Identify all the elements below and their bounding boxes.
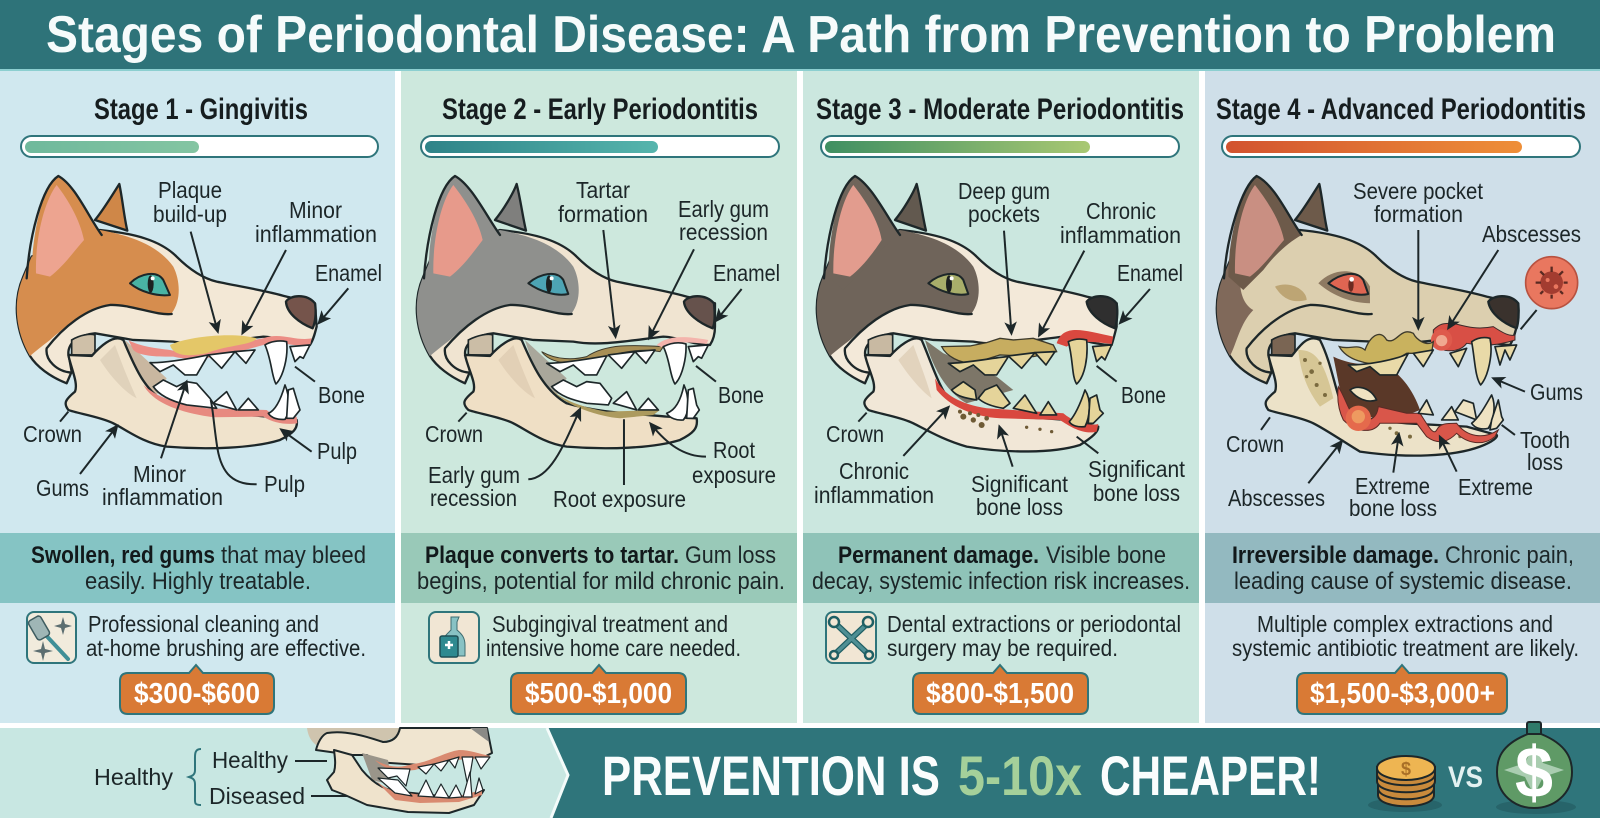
icon: coin stack: $ [1401,759,1411,779]
prevention message: CHEAPER! [1100,744,1321,807]
severity bar: stage 3 [821,136,1179,157]
callout: gums: Gums [36,475,89,501]
callout: deep gum pockets: pockets [968,201,1040,227]
callout: crown [425,413,483,447]
symptom strip: stage 3: Visible bone [1046,542,1166,569]
label: healthy line: Healthy [212,747,288,773]
callout: significant bone loss centre [971,428,1069,520]
illustration: dog skull stage 3 [817,176,1117,451]
callout: early gum recession lower: Early gum [428,462,520,488]
callout: root exposure right: exposure [692,462,776,488]
symptom strip: stage 3 [803,533,1199,603]
callout: crown [1226,417,1284,457]
callout: early gum recession upper [650,196,769,337]
callout: minor inflammation upper: inflammation [255,221,377,247]
callout: chronic inflammation upper [1040,198,1181,334]
callout: tartar formation: Tartar [576,177,630,203]
callout: crown: Crown [425,421,483,447]
callout: chronic inflammation lower: Chronic [839,458,909,484]
callout: enamel [713,260,780,319]
symptom strip: stage 2 [401,533,797,603]
prevention message [602,744,1321,807]
callout: enamel: Enamel [315,260,382,286]
illustration: dog skull stage 2 [417,176,715,448]
icon: money bag [1496,722,1576,814]
vs label: VS [1448,761,1483,794]
callout: crown: Crown [826,421,884,447]
callout: minor inflammation lower: Minor [133,461,186,487]
cost badge: stage 3: $800-$1,500 [926,678,1074,710]
callout: significant bone loss right [1077,437,1186,506]
symptom strip: stage 2: Gum loss [685,542,776,569]
symptom strip: stage 3: decay, systemic infection risk increases. [812,568,1190,595]
callout: extreme bone loss [1349,436,1437,521]
treatment text: stage 3 [887,611,1181,661]
callout: extreme [1441,438,1533,500]
symptom strip: stage 1: easily. Highly treatable. [85,568,311,595]
treatment text: stage 3: surgery may be required. [887,635,1118,661]
callout: root exposure lower [553,419,686,512]
callout: significant bone loss centre: Significant [971,471,1069,497]
callout: severe pocket formation: Severe pocket [1353,178,1484,204]
callout: pulp right [283,431,357,464]
callout: root exposure right [652,425,776,488]
cost badge: stage 4 [1297,665,1507,714]
label: healthy: Healthy [94,764,174,790]
callout: bone: Bone [1121,382,1166,408]
panel: stage 2 early periodontitis [401,71,797,723]
symptom strip: stage 4 [1205,533,1600,603]
callout: pulp right: Pulp [317,438,357,464]
callout: gums [1495,379,1583,405]
callout: early gum recession lower: recession [430,485,517,511]
callout: extreme bone loss: bone loss [1349,495,1437,521]
cost badge: stage 3 [913,665,1088,714]
callout: root exposure lower: Root exposure [553,486,686,512]
callout: minor inflammation upper [243,197,377,332]
callout: crown [826,413,884,447]
callout: tooth loss: loss [1527,449,1563,475]
treatment text: stage 3: Dental extractions or periodontal [887,611,1181,637]
callout: gums [36,427,116,501]
symptom strip: stage 2: begins, potential for mild chronic pain. [417,568,785,595]
callout: bone [696,366,764,408]
callout: enamel: Enamel [713,260,780,286]
callout: tooth loss [1502,425,1570,475]
callout: abscesses lower: Abscesses [1228,485,1325,511]
severity bar: stage 4 [1222,136,1580,157]
callout: chronic inflammation upper: Chronic [1086,198,1156,224]
callout: pulp lower: Pulp [264,471,305,497]
callout: bone [295,367,365,408]
panel: stage 1 gingivitis [0,71,395,723]
symptom strip: stage 1 [0,533,395,603]
symptom strip: stage 3: Permanent damage. [838,542,1039,569]
icon: money bag: $ [1515,733,1553,813]
icon: crossed wrenches [826,612,876,663]
callout: plaque build-up: Plaque [158,177,222,203]
callout: extreme: Extreme [1458,474,1533,500]
heading: stage 2: Stage 2 - Early Periodontitis [442,93,758,126]
icon: antiseptic bottle [429,612,479,663]
icon: brush [27,612,76,663]
callout: chronic inflammation lower [814,408,947,508]
cost badge: stage 4: $1,500-$3,000+ [1310,678,1495,710]
callout: early gum recession upper: Early gum [678,196,769,222]
heading: stage 1: Stage 1 - Gingivitis [94,93,308,126]
callout: early gum recession upper: recession [679,219,768,245]
callout: minor inflammation lower: inflammation [102,484,223,510]
callout: bone: Bone [318,382,365,408]
callout: chronic inflammation upper: inflammation [1060,222,1181,248]
illustration: small jaw [307,728,492,813]
callout: bone: Bone [718,382,764,408]
callout: significant bone loss right: bone loss [1093,480,1180,506]
treatment text: stage 4: Multiple complex extractions and [1257,611,1553,637]
callout: crown: Crown [23,421,82,447]
callout: chronic inflammation lower: inflammation [814,482,934,508]
callout: significant bone loss right: Significant [1088,456,1186,482]
callout: early gum recession lower [428,411,579,511]
brace [189,749,201,805]
callout: tartar formation: formation [558,201,648,227]
icon: bacteria circle [1521,257,1578,329]
callout: minor inflammation upper: Minor [289,197,342,223]
prevention message: PREVENTION IS [602,744,940,807]
callout: pulp lower [211,400,305,497]
header band [0,0,1600,69]
callout: significant bone loss centre: bone loss [976,494,1063,520]
symptom strip: stage 4: leading cause of systemic disease. [1234,568,1572,595]
heading: stage 3: Stage 3 - Moderate Periodontitis [816,93,1184,126]
treatment text: stage 2: intensive home care needed. [486,635,741,661]
panel: stage 3 moderate periodontitis [803,71,1199,723]
callout: abscesses lower [1228,443,1341,511]
callout: minor inflammation lower [102,383,223,510]
treatment text: stage 2: Subgingival treatment and [492,611,728,637]
cost badge: stage 1: $300-$600 [134,678,260,710]
callout: crown [23,412,82,447]
illustration: dog skull stage 1 [17,176,317,448]
callout: tooth loss: Tooth [1520,427,1570,453]
severity bar: stage 1 [21,136,378,157]
prevention message: 5-10x [958,744,1082,807]
treatment text: stage 1: at-home brushing are effective. [86,635,366,661]
symptom strip: stage 4: Irreversible damage. [1232,542,1439,569]
callout: enamel: Enamel [1117,260,1183,286]
callout: plaque build-up [153,177,227,330]
label: diseased line: Diseased [209,783,305,809]
symptom strip: stage 2: Plaque converts to tartar. [425,542,679,569]
callout: enamel [1117,260,1183,322]
severity bar: stage 2 [421,136,779,157]
treatment text: stage 1: Professional cleaning and [88,611,319,637]
treatment text: stage 4 [1232,611,1579,661]
callout: severe pocket formation [1353,178,1484,327]
treatment text: stage 1 [86,611,366,661]
panel: stage 4 advanced periodontitis [1205,71,1600,723]
cost badge: stage 2: $500-$1,000 [525,678,672,710]
bottom band: comparison [0,722,1600,818]
callout: deep gum pockets: Deep gum [958,178,1050,204]
callout: abscesses upper [1449,221,1581,327]
callout: deep gum pockets [958,178,1050,332]
treatment text: stage 2 [486,611,741,661]
illustration: dog skull stage 4 [1217,176,1519,456]
icon: coin stack [1368,756,1442,812]
callout: gums: Gums [1530,379,1583,405]
callout: tartar formation [558,177,648,335]
callout: abscesses upper: Abscesses [1482,221,1581,247]
callout: severe pocket formation: formation [1374,201,1463,227]
label: healthy line [212,747,327,773]
callout: plaque build-up: build-up [153,201,227,227]
cost badge: stage 1 [120,665,274,714]
symptom strip: stage 4: Chronic pain, [1445,542,1574,569]
callout: enamel [315,260,382,322]
symptom strip: stage 1: that may bleed [221,542,366,569]
symptom strip: stage 1: Swollen, red gums [31,542,215,569]
callout: crown: Crown [1226,431,1284,457]
callout: bone [1097,366,1166,408]
cost badge: stage 2 [511,665,686,714]
callout: root exposure right: Root [713,437,756,463]
callout: extreme bone loss: Extreme [1355,473,1430,499]
